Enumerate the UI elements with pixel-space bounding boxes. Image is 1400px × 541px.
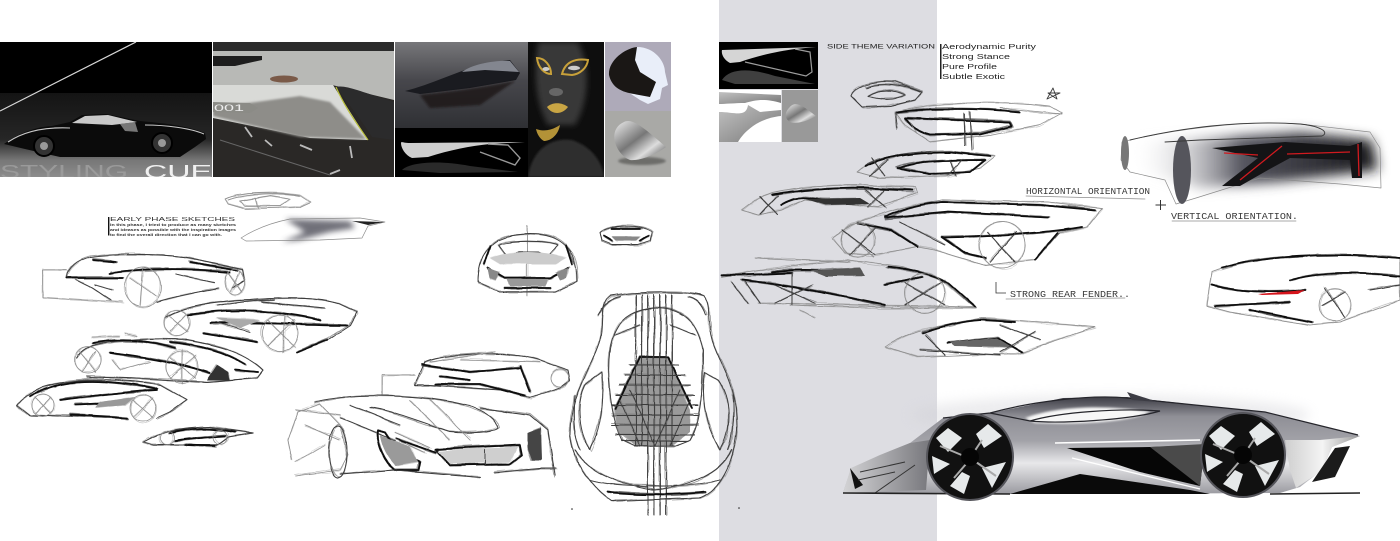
rear wheel [1201,413,1285,497]
model badge: 001 [214,103,244,113]
roof line [943,397,1358,435]
panel: skull robot image [605,42,671,111]
gold eye right [562,60,588,75]
early phase body line 1: In this phase, I tried to produce as many sketches [110,223,236,227]
windscreen tip [1127,392,1158,402]
side theme heading: SIDE THEME VARIATION [827,44,935,50]
gold eye left [537,58,551,74]
sketch: small front view car [600,226,652,245]
side theme attributes list [940,44,1037,81]
front wheel [927,414,1013,500]
panel: motorcycle tank photo [213,42,394,177]
attribute 4: Subtle Exotic [942,74,1006,81]
underbody [1010,474,1210,494]
sketch: right page car 6 [722,258,975,318]
sketch: side car A [43,254,245,307]
car body [843,397,1360,494]
early phase text block [108,217,236,237]
gold lips [547,103,568,113]
grey right page panel [719,0,937,541]
sketch: right page car 2 [895,103,1062,150]
rear tail section [1285,436,1360,488]
nose surface [843,440,930,493]
panel: black loop sculpture [395,128,528,177]
caption accent word: CUE [144,162,212,182]
small ink dots [571,507,740,510]
sketch: shaded side rendering with red accents [1121,123,1381,204]
panel: styling cue photo [0,42,212,182]
early phase body line 3: to find the overall direction that I can go with. [110,233,222,237]
sketch: right page car 3 [857,151,995,178]
attribute 1: Aerodynamic Purity [942,44,1037,51]
sketch: right page car 7 [885,318,1095,357]
sketch: side car B [164,298,357,352]
gold neck piece [536,125,560,141]
sketch: side car D [17,380,187,421]
nose intake [850,468,863,489]
red stripe [1258,290,1305,295]
sketch: right page car 1 [851,82,922,107]
early phase heading: EARLY PHASE SKETCHES [110,217,235,223]
sketch: front view car [478,226,577,296]
sketch: rear side car G [382,352,570,398]
sketch: small top side view [225,193,311,209]
sketch: blurred side rendering [241,218,385,242]
sketch: right page car 4 [742,185,917,215]
plus sign [1156,200,1166,210]
handwritten note: strong rear fender: STRONG REAR FENDER.. [1010,289,1130,300]
panel: gold makeup portrait [528,42,604,177]
sketch: small side car E [143,427,253,446]
early phase body line 2: and ideases as possible with the inspiration images [110,228,236,232]
handwritten note: strong rear fender [996,282,1130,300]
sketch: top view car wireframe [570,292,737,515]
star doodle [1047,88,1060,99]
handwritten note: vertical orientation: VERTICAL ORIENTATION. [1171,211,1298,222]
sketch: right page car 5 large [832,200,1102,268]
side intake [1067,445,1205,486]
styling cue caption: STYLING [0,162,128,182]
icon: black classic sports car [4,114,206,157]
sketch: right side car with red stripe [1207,255,1400,325]
panel: right mood images [719,42,818,142]
panel: yacht on water photo [395,42,528,128]
attribute 2: Strong Stance [942,54,1010,61]
handwritten note: horizontal orientation: HORIZONTAL ORIENTATION [1026,186,1150,197]
sketch: large three quarter front car [288,396,556,478]
attribute 3: Pure Profile [942,64,997,71]
sketch: side car C [75,333,263,384]
panel: silver cone image [605,111,671,177]
final silver concept car rendering [843,392,1360,500]
canopy highlight [1025,407,1150,424]
